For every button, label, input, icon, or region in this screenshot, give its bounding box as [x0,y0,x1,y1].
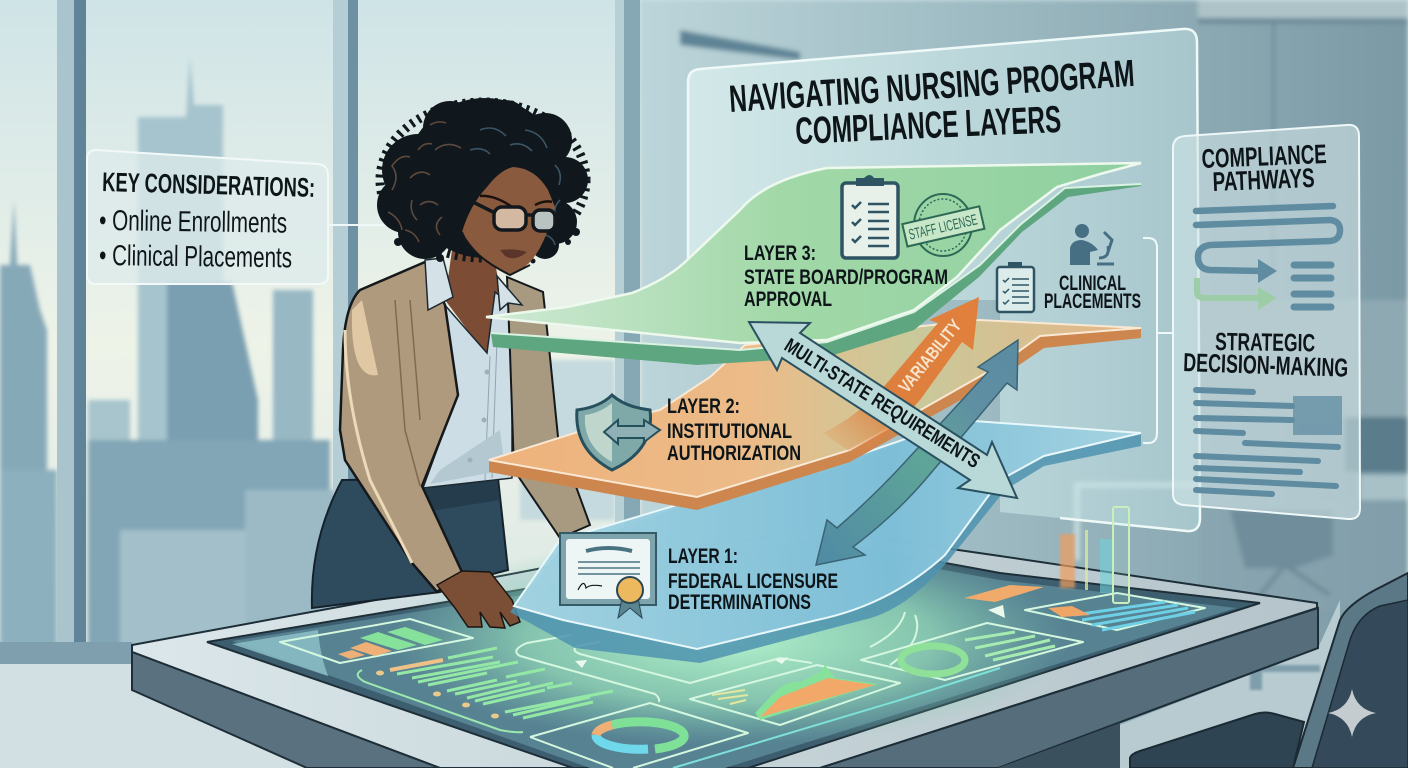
window frames [57,0,86,650]
area chart [712,665,878,720]
holographic bars [1060,507,1129,603]
connector paths [516,635,659,702]
text: layer 1 [668,545,838,614]
panel: compliance pathways and decision-making [1173,125,1360,519]
hair [377,98,588,264]
arrow: variability: VARIABILITY [895,316,965,397]
arrow: blue two-way [816,340,1018,565]
heading: compliance pathways: COMPLIANCE [1201,139,1327,174]
neck and chest [445,250,500,356]
icon: small clipboard [997,262,1034,312]
panel: key considerations: KEY CONSIDERATIONS: [102,167,316,203]
text: layer 3: LAYER 3: [744,242,816,265]
panel: title glass [688,29,1200,531]
text: layer 2: INSTITUTIONAL [667,420,792,443]
layer 3 green surface [486,163,1141,365]
glasses [473,202,555,231]
text lines [1196,390,1338,494]
title text: NAVIGATING NURSING PROGRAM [728,53,1136,121]
text: layer 2 [667,395,801,465]
ring widget [901,632,1055,674]
icon: shield with arrow [577,395,660,470]
widget outlines [280,619,473,663]
text: layer 3 [744,242,948,311]
chair [1130,573,1408,768]
title text: COMPLIANCE LAYERS [795,99,1062,153]
skyline [0,56,615,660]
clinical placements block: PLACEMENTS [1044,290,1141,313]
donut widget [596,722,684,749]
woman figure [312,98,590,628]
wall and ceiling [640,0,1408,768]
bars widget [338,627,443,659]
jacket right [507,277,590,538]
collar [425,258,453,310]
heading: compliance pathways: PATHWAYS [1212,163,1315,197]
text: layer 1: DETERMINATIONS [668,591,811,614]
arrow: multi-state requirements: MULTI-STATE REQUIREMENTS [780,335,984,473]
heading: strategic decision-making [1183,328,1349,383]
table screen [207,535,1260,768]
icon: sparkle watermark [1328,689,1376,737]
title text [728,53,1136,153]
text: layer 3: STATE BOARD/PROGRAM [744,266,948,289]
icon: person with microscope [1070,224,1114,265]
text: layer 2: AUTHORIZATION [667,442,801,465]
heading: strategic decision-making: STRATEGIC [1215,328,1315,357]
bracket connector [1143,238,1172,443]
icon: clipboard checklist [842,175,898,258]
pants [312,478,508,608]
jacket left [340,262,462,592]
clinical placements block: CLINICAL [1059,272,1126,295]
panel: key considerations: • Clinical Placements [99,240,292,274]
pathway diagram [1196,206,1340,310]
table [132,530,1318,768]
clinical placements block [997,224,1141,313]
text: layer 2: LAYER 2: [667,395,740,418]
heading: compliance pathways [1201,139,1327,197]
icon: staff license stamp: STAFF LICENSE [907,211,979,244]
icon: certificate with ribbon [560,533,656,618]
hand [437,571,520,628]
layer 2 orange surface [489,320,1141,510]
panel: key considerations: • Online Enrollments [99,205,287,240]
shirt [423,292,512,488]
text list [397,648,613,718]
text: layer 1: FEDERAL LICENSURE [668,570,838,593]
arrow: variability [823,297,979,457]
text: layer 3: APPROVAL [744,288,832,311]
text: layer 1: LAYER 1: [668,545,738,568]
icon: staff license stamp [902,194,984,256]
panel: key considerations [87,150,400,284]
layer 1 blue surface [510,420,1141,663]
face [462,167,555,275]
